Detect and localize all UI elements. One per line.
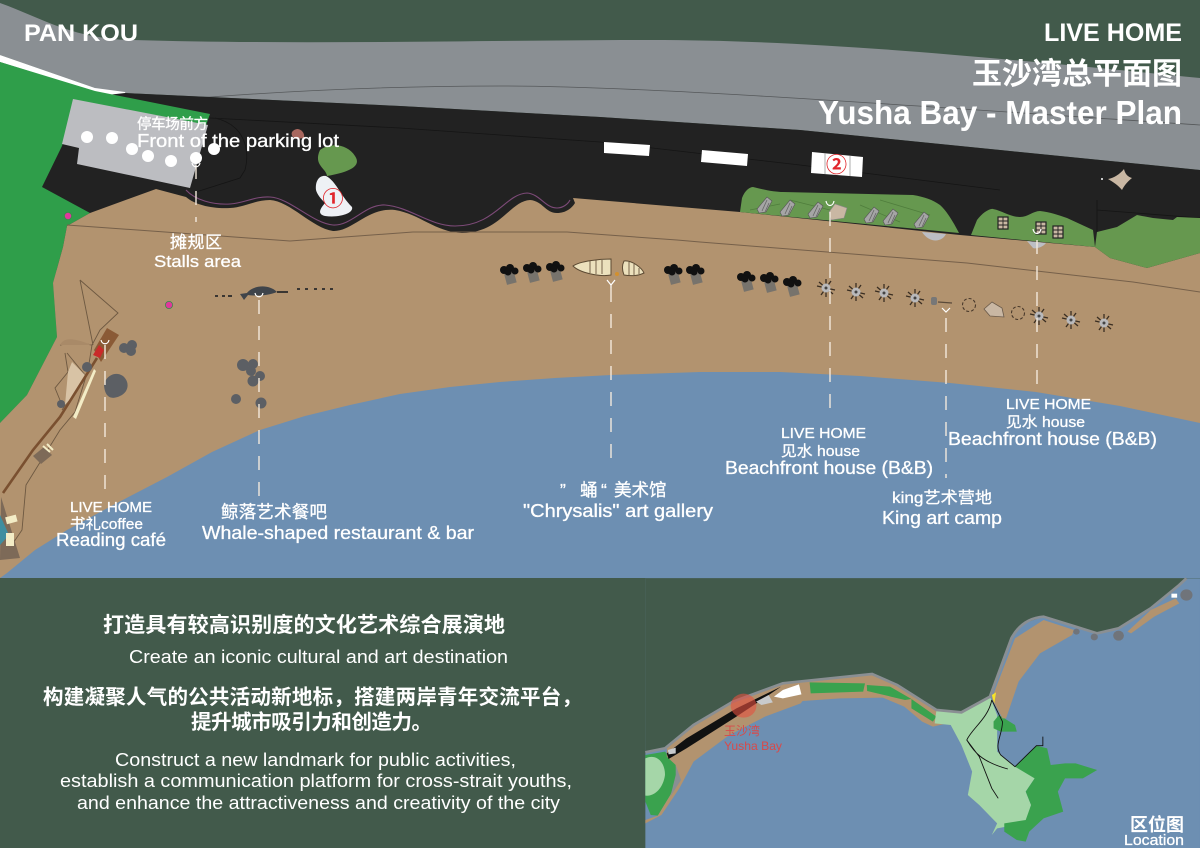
title block: LIVE HOME (1044, 19, 1182, 47)
label: whale restaurant (202, 502, 474, 543)
label: chrysalis gallery: ” (560, 480, 566, 500)
label: reading cafe: LIVE HOME (70, 499, 152, 516)
text: landmark english: Construct a new landmark for public activities, (115, 750, 516, 770)
label: whale restaurant: 鲸落艺术餐吧 (221, 502, 327, 522)
pink markers (64, 212, 173, 309)
label: beachfront house west (725, 425, 933, 478)
garden 3 (1095, 215, 1200, 268)
text: landmark english: and enhance the attractiveness and creativity of the city (77, 793, 560, 813)
mainland (645, 578, 1186, 752)
black plaza strip (667, 687, 781, 759)
title block: Yusha Bay - Master Plan (818, 94, 1182, 131)
label: reading cafe: 书礼coffee (70, 516, 143, 533)
building 1 (316, 176, 352, 216)
heading: landmark: 构建凝聚人气的公共活动新地标，搭建两岸青年交流平台， (43, 685, 582, 709)
cocoon art gallery (573, 259, 644, 276)
canopy tent (1101, 169, 1132, 190)
leader lines (105, 165, 1037, 502)
star pavilions (817, 279, 1113, 332)
location label: Yusha Bay: Yusha Bay (724, 739, 782, 753)
location map (645, 578, 1200, 848)
label: beachfront house east (948, 396, 1157, 449)
label: chrysalis gallery: 美术馆 (614, 480, 666, 500)
text: landmark english: establish a communication platform for cross-strait youths, (60, 771, 572, 791)
label: chrysalis gallery: “ (601, 480, 607, 500)
text: destination english: Create an iconic cultural and art destination (129, 647, 508, 667)
west green headland (645, 752, 677, 816)
island paths (967, 700, 1043, 798)
sandy beach (0, 189, 1200, 578)
label: chrysalis gallery: "Chrysalis" art gallery (523, 501, 713, 521)
sea (0, 372, 1200, 578)
label: chrysalis gallery (523, 480, 713, 521)
building 1: ① (322, 188, 344, 211)
whale restaurant (215, 286, 333, 300)
road (0, 3, 1200, 170)
label: parking lot: Front of the parking lot (137, 131, 339, 151)
label: beachfront house east: 见水 house (1006, 414, 1085, 431)
parking white dots (81, 131, 220, 167)
heading: project name: PAN KOU (24, 20, 138, 47)
label: beachfront house east: LIVE HOME (1006, 396, 1091, 413)
purple walkway line (186, 190, 570, 226)
label: reading cafe: Reading café (56, 530, 166, 550)
label: stalls area (154, 233, 242, 271)
coastal greens (810, 682, 936, 722)
reading cafe headland (0, 280, 119, 560)
bay beach (645, 674, 947, 823)
building 2: ② (826, 154, 847, 177)
leader pin heads (101, 163, 1041, 344)
king art camp (931, 297, 1024, 320)
master plan map (0, 3, 1200, 578)
label: parking lot: 停车场前方 (137, 116, 208, 133)
text: landmark english (60, 750, 572, 813)
east strip (1127, 598, 1179, 633)
location caption (1124, 814, 1184, 848)
heading: destination: 打造具有较高识别度的文化艺术综合展演地 (103, 613, 505, 637)
label: reading cafe (56, 499, 166, 550)
gray parking and white building (668, 684, 801, 797)
east beach (992, 620, 1074, 718)
island dark green (1004, 746, 1097, 842)
planting blobs (292, 129, 357, 176)
marker (731, 694, 756, 718)
east rocks (1073, 589, 1192, 641)
garden 1 (740, 187, 959, 240)
label: king art camp (882, 489, 1002, 528)
location label: Yusha Bay: 玉沙湾 (724, 723, 760, 738)
rocks (104, 340, 266, 408)
label: stalls area: Stalls area (154, 252, 242, 271)
title block (818, 19, 1182, 131)
palm umbrellas (500, 261, 802, 297)
white road edge (0, 55, 128, 101)
label: beachfront house east: Beachfront house (B&B) (948, 429, 1157, 449)
location caption: 区位图 (1130, 814, 1184, 835)
label: stalls area: 摊规区 (170, 233, 222, 252)
location label: Yusha Bay (724, 723, 782, 753)
label: parking lot (137, 116, 339, 151)
panel: vision statements (43, 613, 582, 813)
garden 2 (971, 209, 1095, 248)
label: king art camp: king艺术营地 (892, 489, 992, 507)
parking lot (62, 99, 220, 188)
paved black zone (40, 93, 1200, 270)
title block: 玉沙湾总平面图 (972, 57, 1182, 91)
label: beachfront house west: LIVE HOME (781, 425, 866, 442)
heading: landmark (43, 685, 582, 734)
building 2 (811, 152, 863, 177)
label: king art camp: King art camp (882, 508, 1002, 528)
island light green (935, 697, 1035, 835)
coast road (645, 578, 1186, 752)
label: chrysalis gallery: 蛹 (580, 480, 598, 500)
green slope (0, 62, 210, 423)
heading: landmark: 提升城市吸引力和创造力。 (191, 710, 432, 734)
label: beachfront house west: Beachfront house (B&B) (725, 458, 933, 478)
label: whale restaurant: Whale-shaped restaurant & bar (202, 523, 474, 543)
label: beachfront house west: 见水 house (781, 443, 860, 460)
white pavilions (604, 142, 748, 166)
